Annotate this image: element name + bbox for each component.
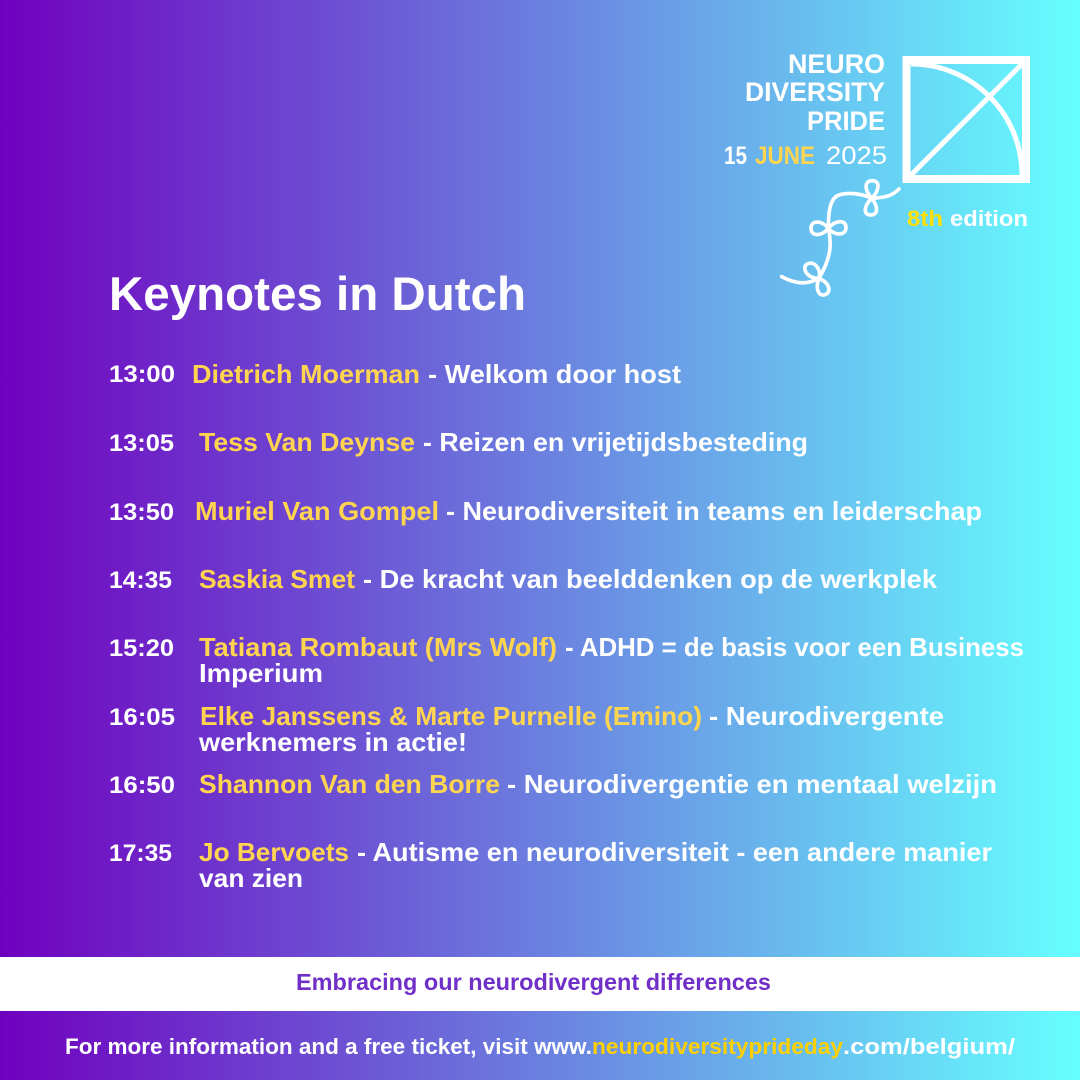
- row 13:05: Tess Van Deynse: [199, 427, 415, 457]
- row 13:00: 13:00: [109, 361, 175, 388]
- logo wordmark: PRIDE: [807, 106, 885, 136]
- tagline band: [0, 957, 1080, 1011]
- logo wordmark: 15: [724, 142, 747, 170]
- row 13:00: Dietrich Moerman: [192, 359, 420, 389]
- row 16:05: Elke Janssens & Marte Purnelle (Emino): [200, 701, 702, 731]
- row 13:50: - Neurodiversiteit in teams en leiderschap: [446, 496, 982, 526]
- edition label: 8th: [907, 206, 943, 231]
- row 14:35: - De kracht van beelddenken op de werkplek: [363, 564, 938, 594]
- row 16:05: - Neurodivergente: [709, 701, 944, 731]
- row 15:20: 15:20: [109, 635, 174, 662]
- row 13:50: [109, 496, 982, 526]
- logo wordmark: DIVERSITY: [745, 77, 885, 107]
- logo wordmark: NEURO: [788, 49, 885, 79]
- row 15:20: Tatiana Rombaut (Mrs Wolf): [199, 632, 557, 662]
- tagline text: Embracing our neurodivergent differences: [296, 969, 771, 995]
- row 16:50: [109, 769, 997, 799]
- schedule list: [109, 359, 1024, 893]
- row 13:50: 13:50: [109, 499, 174, 526]
- row 15:20: [109, 632, 1024, 688]
- row 15:20: - ADHD = de basis voor een Business: [565, 632, 1024, 662]
- edition label: edition: [950, 206, 1028, 231]
- footer call to action: [65, 1034, 1015, 1059]
- row 15:20: Imperium: [199, 658, 323, 688]
- row 13:05: 13:05: [109, 430, 174, 457]
- logo wordmark: [724, 49, 887, 170]
- row 14:35: [109, 564, 938, 594]
- footer call to action: neurodiversityprideday: [592, 1034, 844, 1059]
- logo wordmark: 2025: [826, 142, 887, 170]
- row 17:35: van zien: [199, 863, 303, 893]
- footer call to action: .com/belgium/: [843, 1034, 1015, 1059]
- row 16:50: Shannon Van den Borre: [199, 769, 500, 799]
- logo: [724, 49, 1028, 295]
- row 13:00: [109, 359, 681, 389]
- row 13:05: [109, 427, 808, 457]
- row 13:00: - Welkom door host: [428, 359, 681, 389]
- logo wordmark: JUNE: [755, 142, 815, 170]
- row 17:35: Jo Bervoets: [199, 837, 349, 867]
- row 14:35: Saskia Smet: [199, 564, 355, 594]
- row 16:05: [109, 701, 944, 757]
- row 16:50: - Neurodivergentie en mentaal welzijn: [507, 769, 997, 799]
- row 13:50: Muriel Van Gompel: [195, 496, 439, 526]
- ribbon with knots: [782, 181, 899, 295]
- row 17:35: [109, 837, 992, 893]
- footer call to action: For more information and a free ticket, visit www.: [65, 1034, 592, 1059]
- row 17:35: 17:35: [109, 840, 172, 867]
- row 16:50: 16:50: [109, 772, 175, 799]
- logo mark: square with arc and diagonal: [906, 59, 1027, 179]
- title: Keynotes in Dutch: [109, 267, 526, 320]
- row 16:05: werknemers in actie!: [198, 727, 467, 757]
- row 13:05: - Reizen en vrijetijdsbesteding: [423, 427, 808, 457]
- row 16:05: 16:05: [109, 704, 175, 731]
- row 17:35: - Autisme en neurodiversiteit - een andere manier: [357, 837, 992, 867]
- row 14:35: 14:35: [109, 567, 172, 594]
- edition label: [907, 206, 1028, 231]
